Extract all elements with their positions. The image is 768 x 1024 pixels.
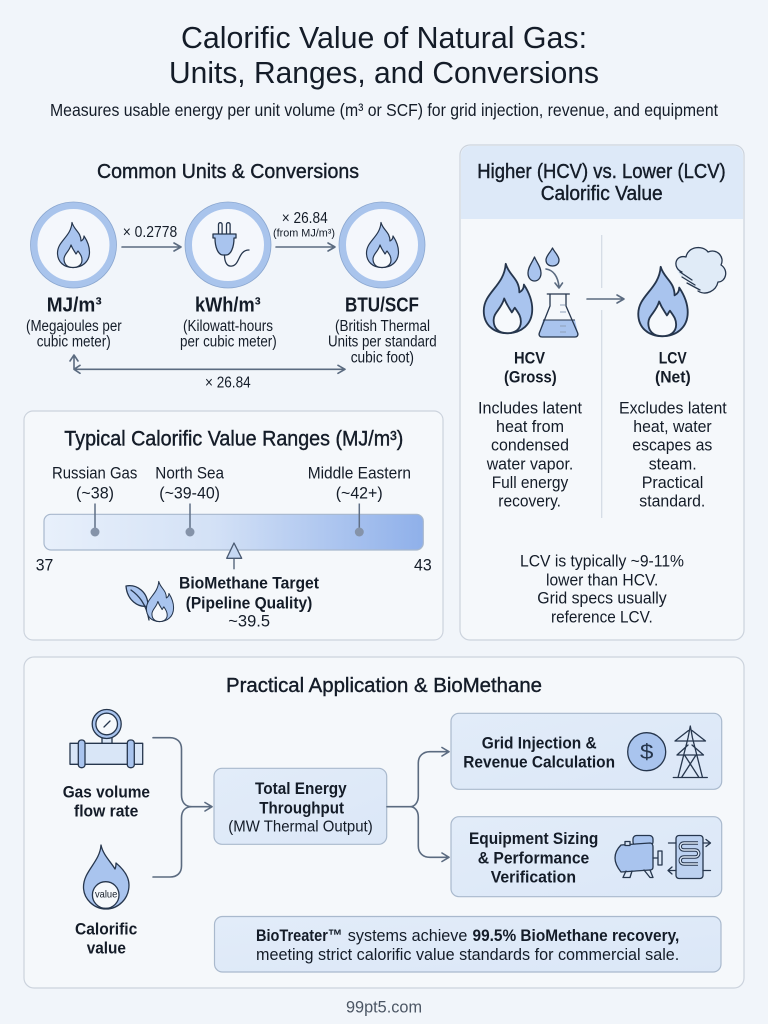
text: biomethane target: ~39.5 bbox=[228, 613, 270, 631]
callout: BioTreater recovery: BioTreater™ bbox=[256, 927, 342, 945]
arrow: HCV to LCV bbox=[587, 295, 624, 303]
label: North Sea: (~39-40) bbox=[159, 484, 220, 502]
box: grid injection and revenue: Revenue Calculation bbox=[463, 754, 615, 772]
label: Russian gas: Russian Gas bbox=[52, 464, 137, 482]
text: HCV description: recovery. bbox=[498, 492, 561, 511]
box: equipment sizing and performance: & Performance bbox=[478, 849, 589, 867]
icon: flame MJ bbox=[30, 202, 116, 288]
label: Russian gas: (~38) bbox=[76, 484, 114, 502]
text: biomethane target bbox=[179, 574, 319, 631]
icon: heat exchanger bbox=[668, 836, 710, 878]
icon: LCV flame bbox=[638, 267, 688, 336]
panel: practical application and biomethane bbox=[24, 657, 744, 988]
icon: motor bbox=[615, 836, 662, 878]
label: lower multiply 26.84: × 26.84 bbox=[205, 375, 251, 392]
heading: practical application: Practical Application & BioMethane bbox=[226, 674, 542, 697]
arrow: kWh to BTU bbox=[276, 243, 335, 251]
text: HCV description bbox=[478, 398, 582, 511]
callout: BioTreater recovery bbox=[214, 916, 721, 972]
unit label: MJ per cubic meter: cubic meter) bbox=[37, 334, 111, 351]
label: gas volume flow rate: flow rate bbox=[74, 803, 138, 821]
icon: power pylon bbox=[673, 726, 707, 778]
text: HCV description: water vapor. bbox=[486, 454, 573, 473]
box: equipment sizing and performance bbox=[451, 817, 722, 897]
text: LCV description: standard. bbox=[639, 492, 705, 511]
icon: steam cloud bbox=[676, 248, 726, 293]
title bbox=[169, 21, 599, 90]
icon: gauge on pipe bbox=[70, 710, 143, 768]
icon: dollar coin bbox=[628, 733, 666, 771]
label: LCV net: LCV bbox=[659, 349, 687, 367]
label: HCV gross bbox=[504, 349, 557, 387]
label: Middle Eastern: Middle Eastern bbox=[308, 464, 411, 482]
box: grid injection and revenue bbox=[451, 713, 722, 789]
label: Middle Eastern bbox=[308, 464, 411, 502]
text: HCV description: condensed bbox=[491, 436, 569, 455]
label: HCV gross: (Gross) bbox=[504, 369, 557, 387]
label: calorific value bbox=[75, 920, 137, 957]
box: total energy throughput: (MW Thermal Output) bbox=[228, 819, 373, 836]
title: Calorific Value of Natural Gas: bbox=[181, 21, 587, 55]
heading: ranges: Typical Calorific Value Ranges (MJ/m³) bbox=[64, 428, 403, 451]
arrow: MJ to kWh bbox=[122, 243, 181, 251]
label: North Sea: North Sea bbox=[155, 464, 225, 482]
text: HCV description: Full energy bbox=[492, 473, 569, 492]
arrow: inputs to throughput bbox=[153, 738, 212, 877]
text: biomethane target: BioMethane Target bbox=[179, 574, 319, 592]
title: Units, Ranges, and Conversions bbox=[169, 56, 599, 90]
arrow: MJ to BTU two-way bbox=[70, 355, 345, 373]
callout: BioTreater recovery: 99.5% BioMethane recovery, bbox=[472, 927, 679, 945]
text: LCV description: steam. bbox=[649, 454, 697, 473]
text: LCV description: heat, water bbox=[633, 417, 712, 436]
callout: BioTreater recovery: systems achieve bbox=[348, 927, 467, 945]
text: HCV description: Includes latent bbox=[478, 398, 582, 417]
label: gas volume flow rate bbox=[63, 783, 150, 821]
marker: biomethane target bbox=[227, 543, 242, 569]
icon: dollar coin: $ bbox=[640, 741, 654, 764]
text: LCV description: Excludes latent bbox=[619, 398, 727, 417]
text: LCV description bbox=[619, 398, 727, 511]
label: multiply 0.2778: × 0.2778 bbox=[123, 224, 177, 241]
range bar bbox=[44, 504, 423, 550]
unit label: BTU per SCF: cubic foot) bbox=[351, 350, 414, 367]
icon: HCV flame bbox=[484, 264, 532, 333]
text: LCV comparison note bbox=[520, 552, 684, 626]
arrow: throughput to outcomes bbox=[387, 748, 449, 862]
text: LCV description: escapes as bbox=[632, 436, 712, 455]
label: multiply 26.84 from MJ bbox=[273, 210, 335, 240]
unit label: BTU per SCF: BTU/SCF bbox=[345, 295, 419, 317]
box: equipment sizing and performance: Equipment Sizing bbox=[469, 830, 598, 848]
box: total energy throughput: Total Energy bbox=[255, 780, 347, 798]
unit label: kWh per cubic meter: (Kilowatt-hours bbox=[183, 318, 273, 335]
unit label: MJ per cubic meter bbox=[26, 295, 122, 351]
icon: flask bbox=[539, 294, 578, 337]
label: Middle Eastern: (~42+) bbox=[336, 484, 383, 502]
panel: typical calorific value ranges bbox=[24, 411, 443, 640]
icon: flame BTU bbox=[339, 202, 425, 288]
panel: higher vs lower calorific value bbox=[460, 145, 744, 640]
label: calorific value: value bbox=[87, 939, 126, 957]
callout: BioTreater recovery: meeting strict calorific value standards for commercial sale. bbox=[256, 946, 679, 964]
icon: water droplets bbox=[528, 248, 562, 288]
unit label: kWh per cubic meter: per cubic meter) bbox=[180, 334, 277, 351]
icon: flame with value: value bbox=[95, 889, 117, 901]
unit label: kWh per cubic meter bbox=[180, 295, 277, 351]
text: LCV comparison note: LCV is typically ~9-11% bbox=[520, 552, 684, 571]
unit label: BTU per SCF: (British Thermal bbox=[335, 318, 430, 335]
label: LCV net bbox=[655, 349, 691, 387]
unit label: MJ per cubic meter: (Megajoules per bbox=[26, 318, 122, 335]
axis label: 37: 37 bbox=[36, 557, 53, 575]
label: gas volume flow rate: Gas volume bbox=[63, 783, 150, 801]
axis label: 43: 43 bbox=[414, 557, 432, 575]
footer: website: 99pt5.com bbox=[346, 998, 422, 1016]
heading: common units: Common Units & Conversions bbox=[97, 160, 359, 183]
label: HCV gross: HCV bbox=[514, 349, 545, 367]
icon: flame with value bbox=[84, 845, 129, 909]
heading: HCV vs LCV bbox=[477, 160, 726, 205]
box: total energy throughput bbox=[214, 768, 387, 844]
panel header band bbox=[461, 146, 743, 219]
box: total energy throughput: Throughput bbox=[259, 799, 344, 817]
text: LCV description: Practical bbox=[642, 473, 703, 492]
label: multiply 26.84 from MJ: × 26.84 bbox=[282, 210, 328, 227]
unit label: MJ per cubic meter: MJ/m³ bbox=[47, 295, 102, 317]
label: Russian gas bbox=[52, 464, 137, 502]
box: grid injection and revenue: Grid Injection & bbox=[482, 734, 597, 752]
heading: HCV vs LCV: Calorific Value bbox=[541, 182, 663, 205]
label: North Sea bbox=[155, 464, 225, 502]
label: calorific value: Calorific bbox=[75, 920, 137, 938]
section: common units and conversions bbox=[26, 160, 437, 392]
text: LCV comparison note: reference LCV. bbox=[551, 607, 653, 626]
text: LCV comparison note: Grid specs usually bbox=[537, 589, 667, 608]
divider bbox=[601, 235, 603, 518]
unit label: kWh per cubic meter: kWh/m³ bbox=[195, 295, 261, 317]
box: equipment sizing and performance: Verification bbox=[491, 868, 576, 886]
text: biomethane target: (Pipeline Quality) bbox=[186, 594, 312, 612]
unit label: BTU per SCF: Units per standard bbox=[328, 334, 437, 351]
icon: plug bbox=[185, 202, 271, 288]
text: HCV description: heat from bbox=[496, 417, 564, 436]
label: LCV net: (Net) bbox=[655, 369, 691, 387]
label: multiply 26.84 from MJ: (from MJ/m³) bbox=[273, 228, 335, 240]
icon: leaf and flame bbox=[126, 581, 174, 622]
text: LCV comparison note: lower than HCV. bbox=[546, 570, 658, 589]
heading: HCV vs LCV: Higher (HCV) vs. Lower (LCV) bbox=[477, 160, 726, 183]
unit label: BTU per SCF bbox=[328, 295, 437, 367]
